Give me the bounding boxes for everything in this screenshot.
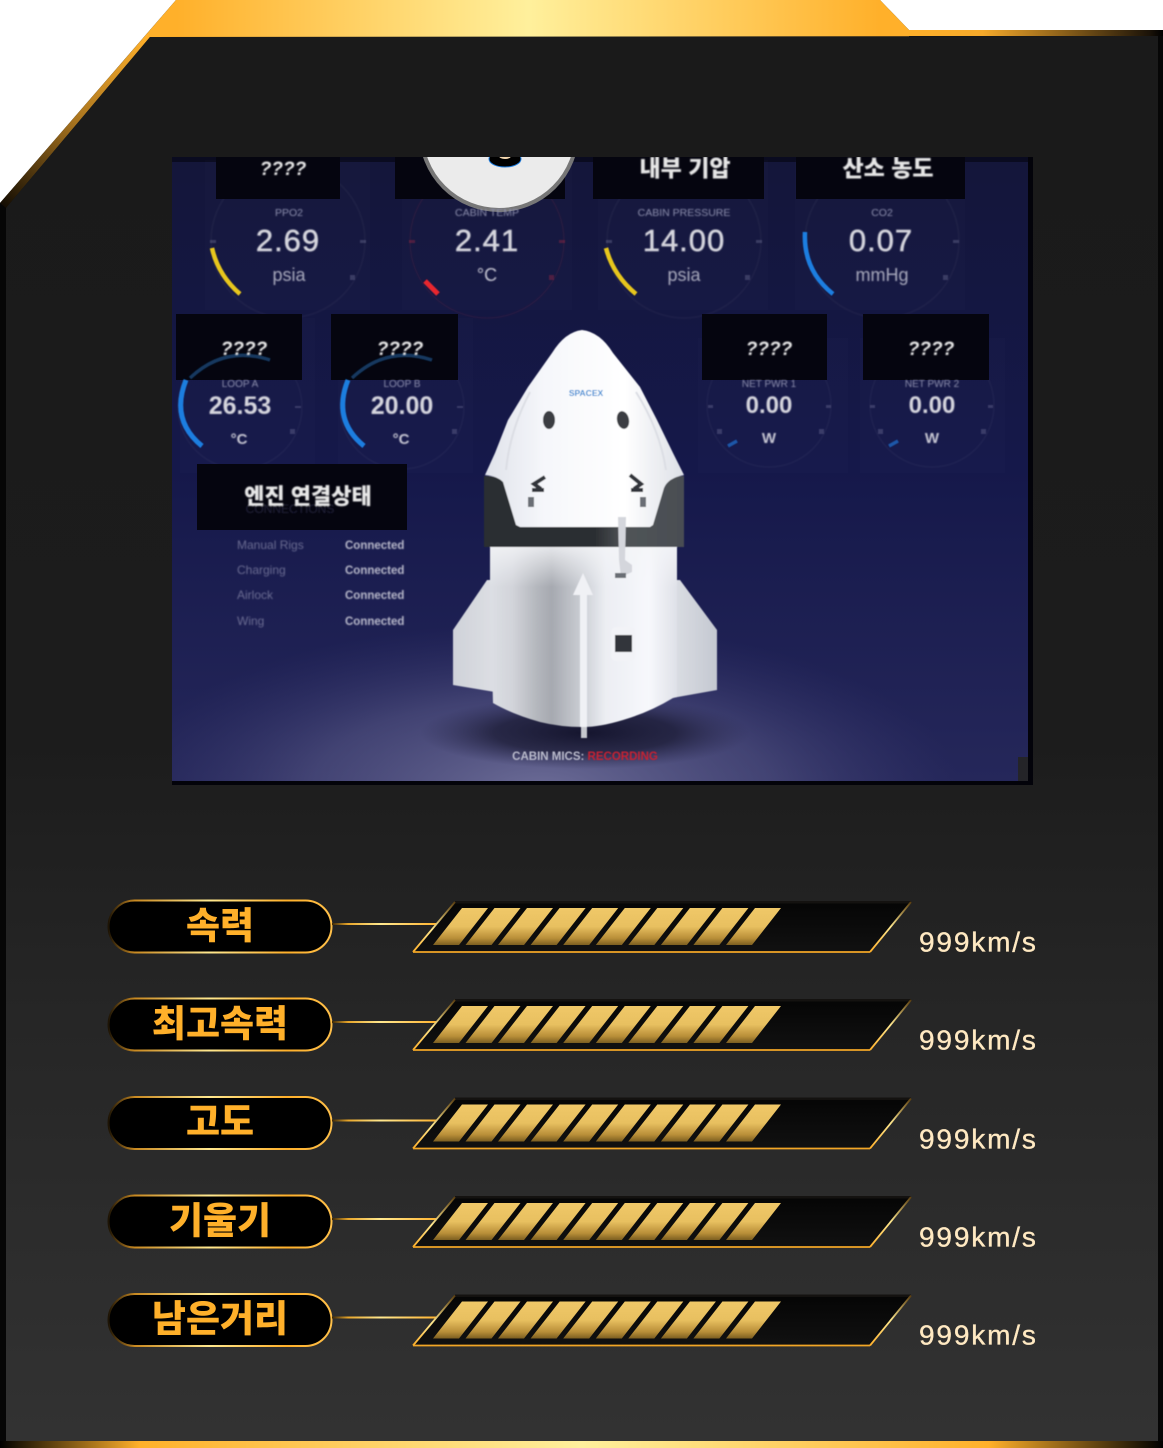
row: altitude: 999km/s (919, 1124, 1038, 1154)
gauge text: 2.69 (256, 223, 320, 258)
bottom gold edge (0, 1441, 1163, 1448)
gauge text: 20.00 (371, 392, 433, 420)
nose (485, 330, 684, 527)
fins (453, 580, 495, 692)
cabin mics status: CABIN MICS: RECORDING (512, 751, 658, 763)
row: remaining distance (108, 1294, 1038, 1350)
connection status list: Connected (345, 590, 404, 602)
gauge text: 14.00 (643, 223, 725, 258)
row: speed (108, 900, 1038, 958)
row: remaining distance: 남은거리 (152, 1298, 288, 1340)
trunk (490, 545, 677, 727)
gauge cards background (180, 160, 1005, 473)
row: remaining distance: 999km/s (919, 1320, 1038, 1350)
black title boxes (176, 157, 989, 530)
gauge text: °C (393, 431, 410, 448)
connection status list: Connected (345, 616, 404, 628)
row: top speed (108, 998, 1038, 1056)
connection status list: Manual Rigs (237, 538, 304, 552)
gauge text: CABIN TEMP (455, 207, 519, 219)
connection status list (237, 484, 404, 628)
gauge text: °C (231, 431, 248, 448)
gauge text: mmHg (856, 265, 908, 285)
gauge text: ???? (377, 339, 424, 360)
gauge rings (410, 199, 564, 318)
row: top speed: 최고속력 (152, 1004, 288, 1044)
gauge text: NET PWR 1 (742, 379, 797, 390)
connection status list: Charging (237, 563, 286, 577)
row: speed: 속력 (186, 906, 254, 946)
capsule markings: SPACEX (569, 388, 603, 398)
gauge text (209, 155, 960, 448)
gauge text: 2.41 (455, 223, 519, 258)
gauge text: CABIN PRESSURE (638, 207, 730, 219)
top right gold edge (905, 30, 1163, 36)
row: tilt (108, 1196, 1038, 1252)
gauge text: ???? (746, 339, 793, 360)
gauge text: PPO2 (275, 207, 303, 219)
row: top speed: 999km/s (919, 1024, 1038, 1056)
gauge text: ???? (908, 339, 955, 360)
row: altitude (108, 1097, 1038, 1154)
connection status list: Wing (237, 614, 264, 628)
gauge text: 산소 농도 (842, 155, 934, 181)
gauge text: 0.00 (909, 392, 955, 419)
connection status list: Airlock (237, 588, 274, 602)
gauge text: 내부 기압 (639, 155, 731, 181)
row: tilt: 기울기 (169, 1200, 271, 1242)
row: altitude: 고도 (186, 1102, 254, 1142)
dashboard screen (172, 157, 1033, 785)
diagonal gold edge (0, 37, 150, 208)
capsule shadow (436, 706, 730, 766)
connection status list: Connected (345, 565, 404, 577)
gauge text: 0.00 (746, 392, 792, 419)
gauge text: psia (667, 265, 701, 285)
gauge text: NET PWR 2 (905, 379, 960, 390)
gauge tick marks (210, 240, 993, 434)
top gold tab (144, 0, 909, 37)
gauge text: CO2 (871, 207, 893, 219)
gauge text: LOOP A (222, 379, 259, 390)
gauge text: ???? (260, 159, 307, 180)
white dial (423, 157, 575, 212)
corner block (1018, 757, 1028, 781)
gauge arcs (181, 232, 898, 446)
row: speed: 999km/s (919, 926, 1038, 958)
gauge text: psia (272, 265, 306, 285)
gauge text: W (762, 430, 777, 447)
gauge text: LOOP B (383, 379, 421, 390)
gauge text: 26.53 (209, 392, 271, 420)
row: tilt: 999km/s (919, 1222, 1038, 1252)
gauge text: 0.07 (849, 223, 913, 258)
gauge text: °C (477, 265, 497, 285)
connection status list: CONNECTIONS (246, 502, 334, 516)
gauge text: W (925, 430, 940, 447)
connection status list: 엔진 연결상태 (244, 484, 372, 509)
rocket capsule (453, 330, 717, 738)
gauge text: ???? (221, 339, 268, 360)
connection status list: Connected (345, 540, 404, 552)
dark band (484, 476, 684, 547)
